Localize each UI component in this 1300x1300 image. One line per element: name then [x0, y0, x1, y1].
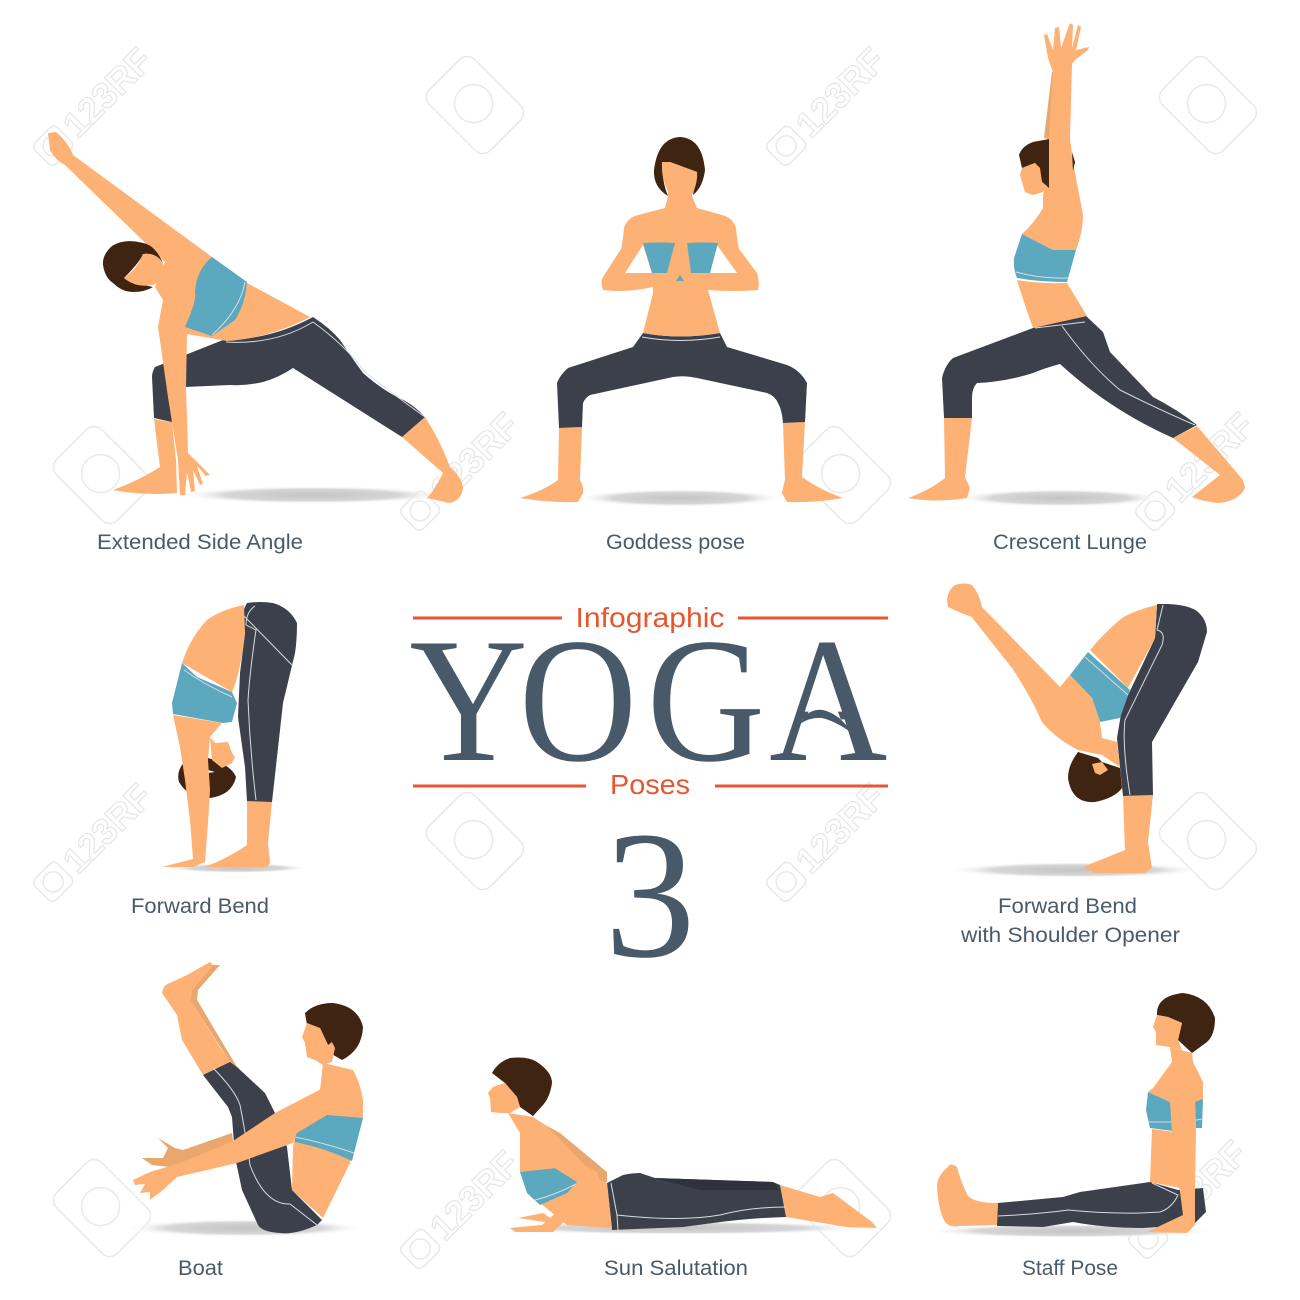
text: 123RF [55, 776, 160, 881]
text: 123RF [1150, 1133, 1255, 1238]
figure: goddess pose [520, 137, 843, 507]
text: 123RF [55, 40, 160, 145]
figure: boat [125, 962, 365, 1237]
label: sun salutation: Sun Salutation [604, 1257, 748, 1280]
label: staff pose: Staff Pose [1022, 1257, 1118, 1280]
label: crescent lunge: Crescent Lunge [993, 531, 1147, 554]
poses heading: Poses [610, 769, 690, 800]
label: goddess pose: Goddess pose [606, 531, 745, 554]
figure: forward bend [162, 602, 309, 873]
figure: extended side angle [48, 132, 463, 504]
infographic heading: Infographic [576, 602, 724, 633]
label: extended side angle: Extended Side Angle [97, 531, 303, 554]
text: 123RF [788, 776, 893, 881]
poses heading [413, 769, 888, 800]
title block [409, 602, 888, 996]
number 3: 3 [604, 795, 696, 996]
label: forward bend with shoulder opener: with Shoulder Opener [960, 924, 1180, 947]
text: 123RF [1157, 405, 1262, 510]
label: boat: Boat [178, 1257, 223, 1280]
figure: staff pose [925, 993, 1215, 1238]
text: 123RF [422, 1143, 527, 1248]
label: forward bend: Forward Bend [131, 895, 269, 918]
text: 123RF [788, 40, 893, 145]
label: forward bend with shoulder opener [960, 895, 1180, 947]
figure: crescent lunge [908, 23, 1245, 507]
figure: sun salutation [488, 1058, 877, 1235]
figure: forward bend with shoulder opener [947, 584, 1207, 878]
infographic heading [413, 602, 888, 633]
label: forward bend with shoulder opener: Forward Bend [998, 895, 1137, 918]
YOGA wordmark: YOGA [409, 602, 887, 799]
text: 123RF [422, 405, 527, 510]
